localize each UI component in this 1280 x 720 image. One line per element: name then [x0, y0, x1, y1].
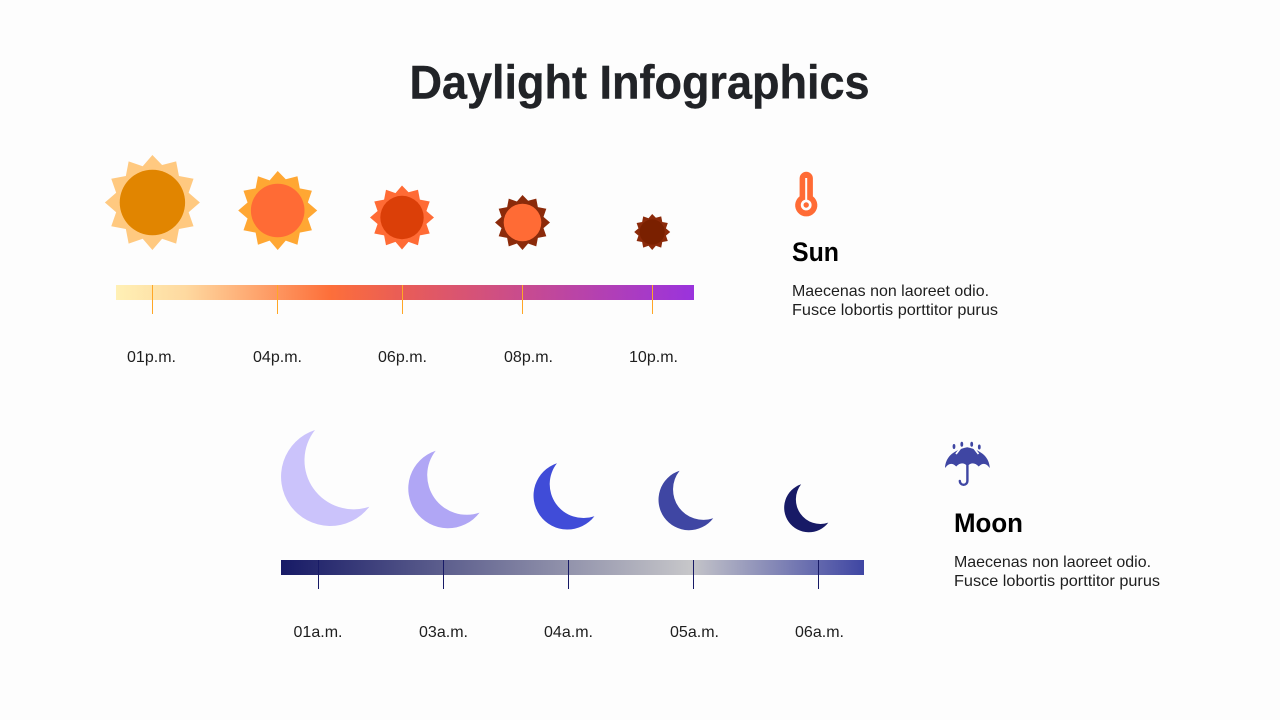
time labels: sun: 08p.m.	[504, 349, 553, 366]
heading: sun: Sun	[792, 237, 839, 267]
time labels: moon: 01a.m.	[294, 624, 342, 641]
gradient bar: sun	[116, 285, 694, 300]
icon: moon 4	[659, 471, 713, 530]
text block: moon: Fusce lobortis porttitor purus	[954, 573, 1160, 590]
time labels: moon: 03a.m.	[419, 624, 468, 641]
time labels: moon	[294, 624, 844, 641]
panel: sun legend	[792, 172, 998, 319]
text block: moon	[954, 554, 1160, 590]
icon: moon 3	[534, 463, 594, 530]
time labels: sun: 04p.m.	[253, 349, 302, 366]
heading: moon: Moon	[954, 508, 1023, 538]
time labels: sun: 06p.m.	[378, 349, 427, 366]
text block: moon: Maecenas non laoreet odio.	[954, 554, 1151, 571]
title: Daylight Infographics	[410, 55, 870, 108]
panel: moon timeline	[281, 430, 864, 641]
time labels: moon: 06a.m.	[795, 624, 844, 641]
icon: sun 2	[238, 171, 317, 250]
icon: sun 3	[370, 186, 434, 250]
icon: moon 1	[281, 430, 369, 526]
tick marks: sun	[152, 285, 653, 314]
icon: umbrella	[945, 442, 990, 485]
tick marks: moon	[318, 560, 819, 589]
time labels: moon: 04a.m.	[544, 624, 593, 641]
icon: moon 5	[784, 484, 828, 532]
icon: sun 1	[105, 155, 200, 250]
icon: thermometer	[795, 172, 817, 216]
text block: sun: Fusce lobortis porttitor purus	[792, 302, 998, 319]
time labels: sun: 10p.m.	[629, 349, 678, 366]
gradient bar: moon	[281, 560, 864, 575]
time labels: moon: 05a.m.	[670, 624, 719, 641]
time labels: sun	[127, 349, 678, 366]
icon: sun 4	[495, 195, 550, 250]
panel: moon legend	[945, 442, 1160, 590]
icon: sun 5	[634, 214, 670, 250]
time labels: sun: 01p.m.	[127, 349, 176, 366]
panel: sun timeline	[105, 155, 694, 366]
text block: sun: Maecenas non laoreet odio.	[792, 283, 989, 300]
icon: moon 2	[408, 451, 480, 528]
text block: sun	[792, 283, 998, 319]
